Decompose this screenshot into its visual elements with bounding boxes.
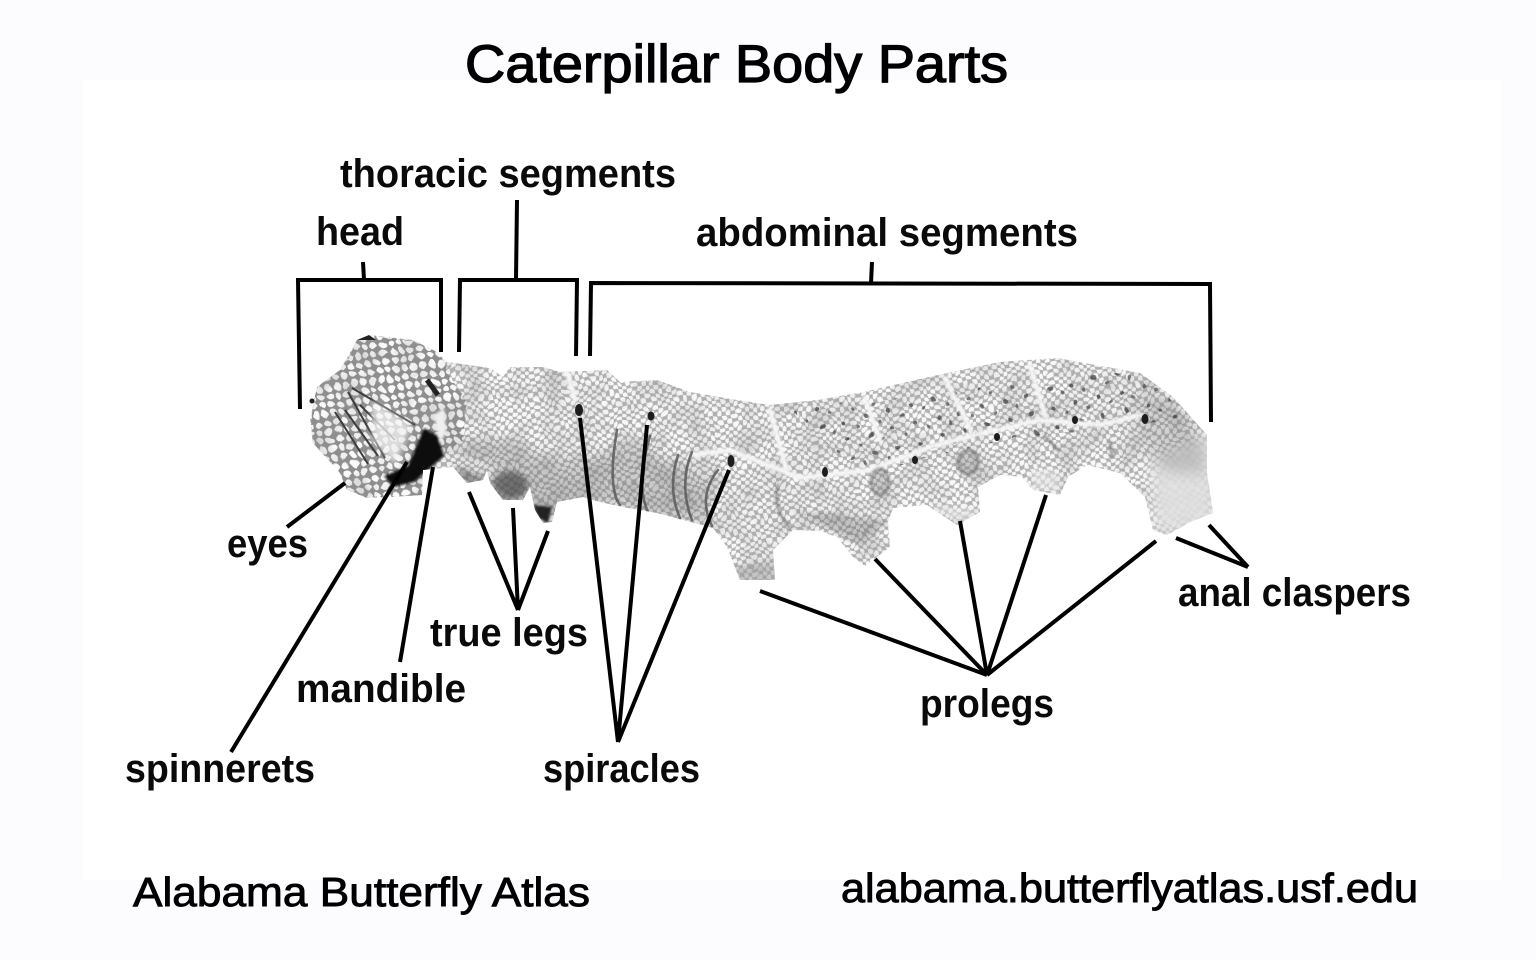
spinnerets label and pointer: spinnerets	[125, 747, 315, 791]
caterpillar head texture	[310, 335, 466, 498]
head label and bracket	[298, 210, 441, 409]
footer: website: alabama.butterflyatlas.usf.edu	[841, 865, 1418, 911]
segment folds	[567, 365, 1140, 528]
abdominal segments label and bracket: abdominal segments	[696, 211, 1078, 255]
anal claspers label and pointers	[1176, 525, 1411, 615]
footer: atlas name: Alabama Butterfly Atlas	[133, 869, 590, 915]
mottled shading	[312, 339, 1210, 573]
thoracic segments label and bracket: thoracic segments	[340, 152, 676, 196]
title: Caterpillar Body Parts	[465, 35, 1008, 94]
abdominal segments label and bracket	[590, 211, 1211, 422]
eyes label and pointer	[227, 483, 345, 566]
mandible label and pointer: mandible	[296, 667, 466, 711]
spinnerets label and pointer	[125, 462, 407, 791]
dorsal dark pits	[790, 370, 1190, 475]
true legs label and pointers: true legs	[430, 611, 588, 655]
mandible label and pointer	[296, 467, 466, 711]
spiracles	[575, 404, 1148, 477]
thoracic segments label and bracket	[340, 152, 676, 356]
caterpillar illustration	[310, 335, 1213, 580]
head face markings	[335, 380, 446, 487]
true legs label and pointers	[430, 492, 588, 655]
spiracles label and pointers: spiracles	[543, 747, 700, 791]
anal claspers label and pointers: anal claspers	[1178, 571, 1411, 615]
body shading	[450, 395, 1215, 585]
prolegs label and pointers	[760, 495, 1156, 726]
spiracles label and pointers	[543, 418, 729, 791]
prolegs label and pointers: prolegs	[920, 682, 1054, 726]
eyes label and pointer: eyes	[227, 522, 308, 566]
head label and bracket: head	[316, 210, 404, 254]
